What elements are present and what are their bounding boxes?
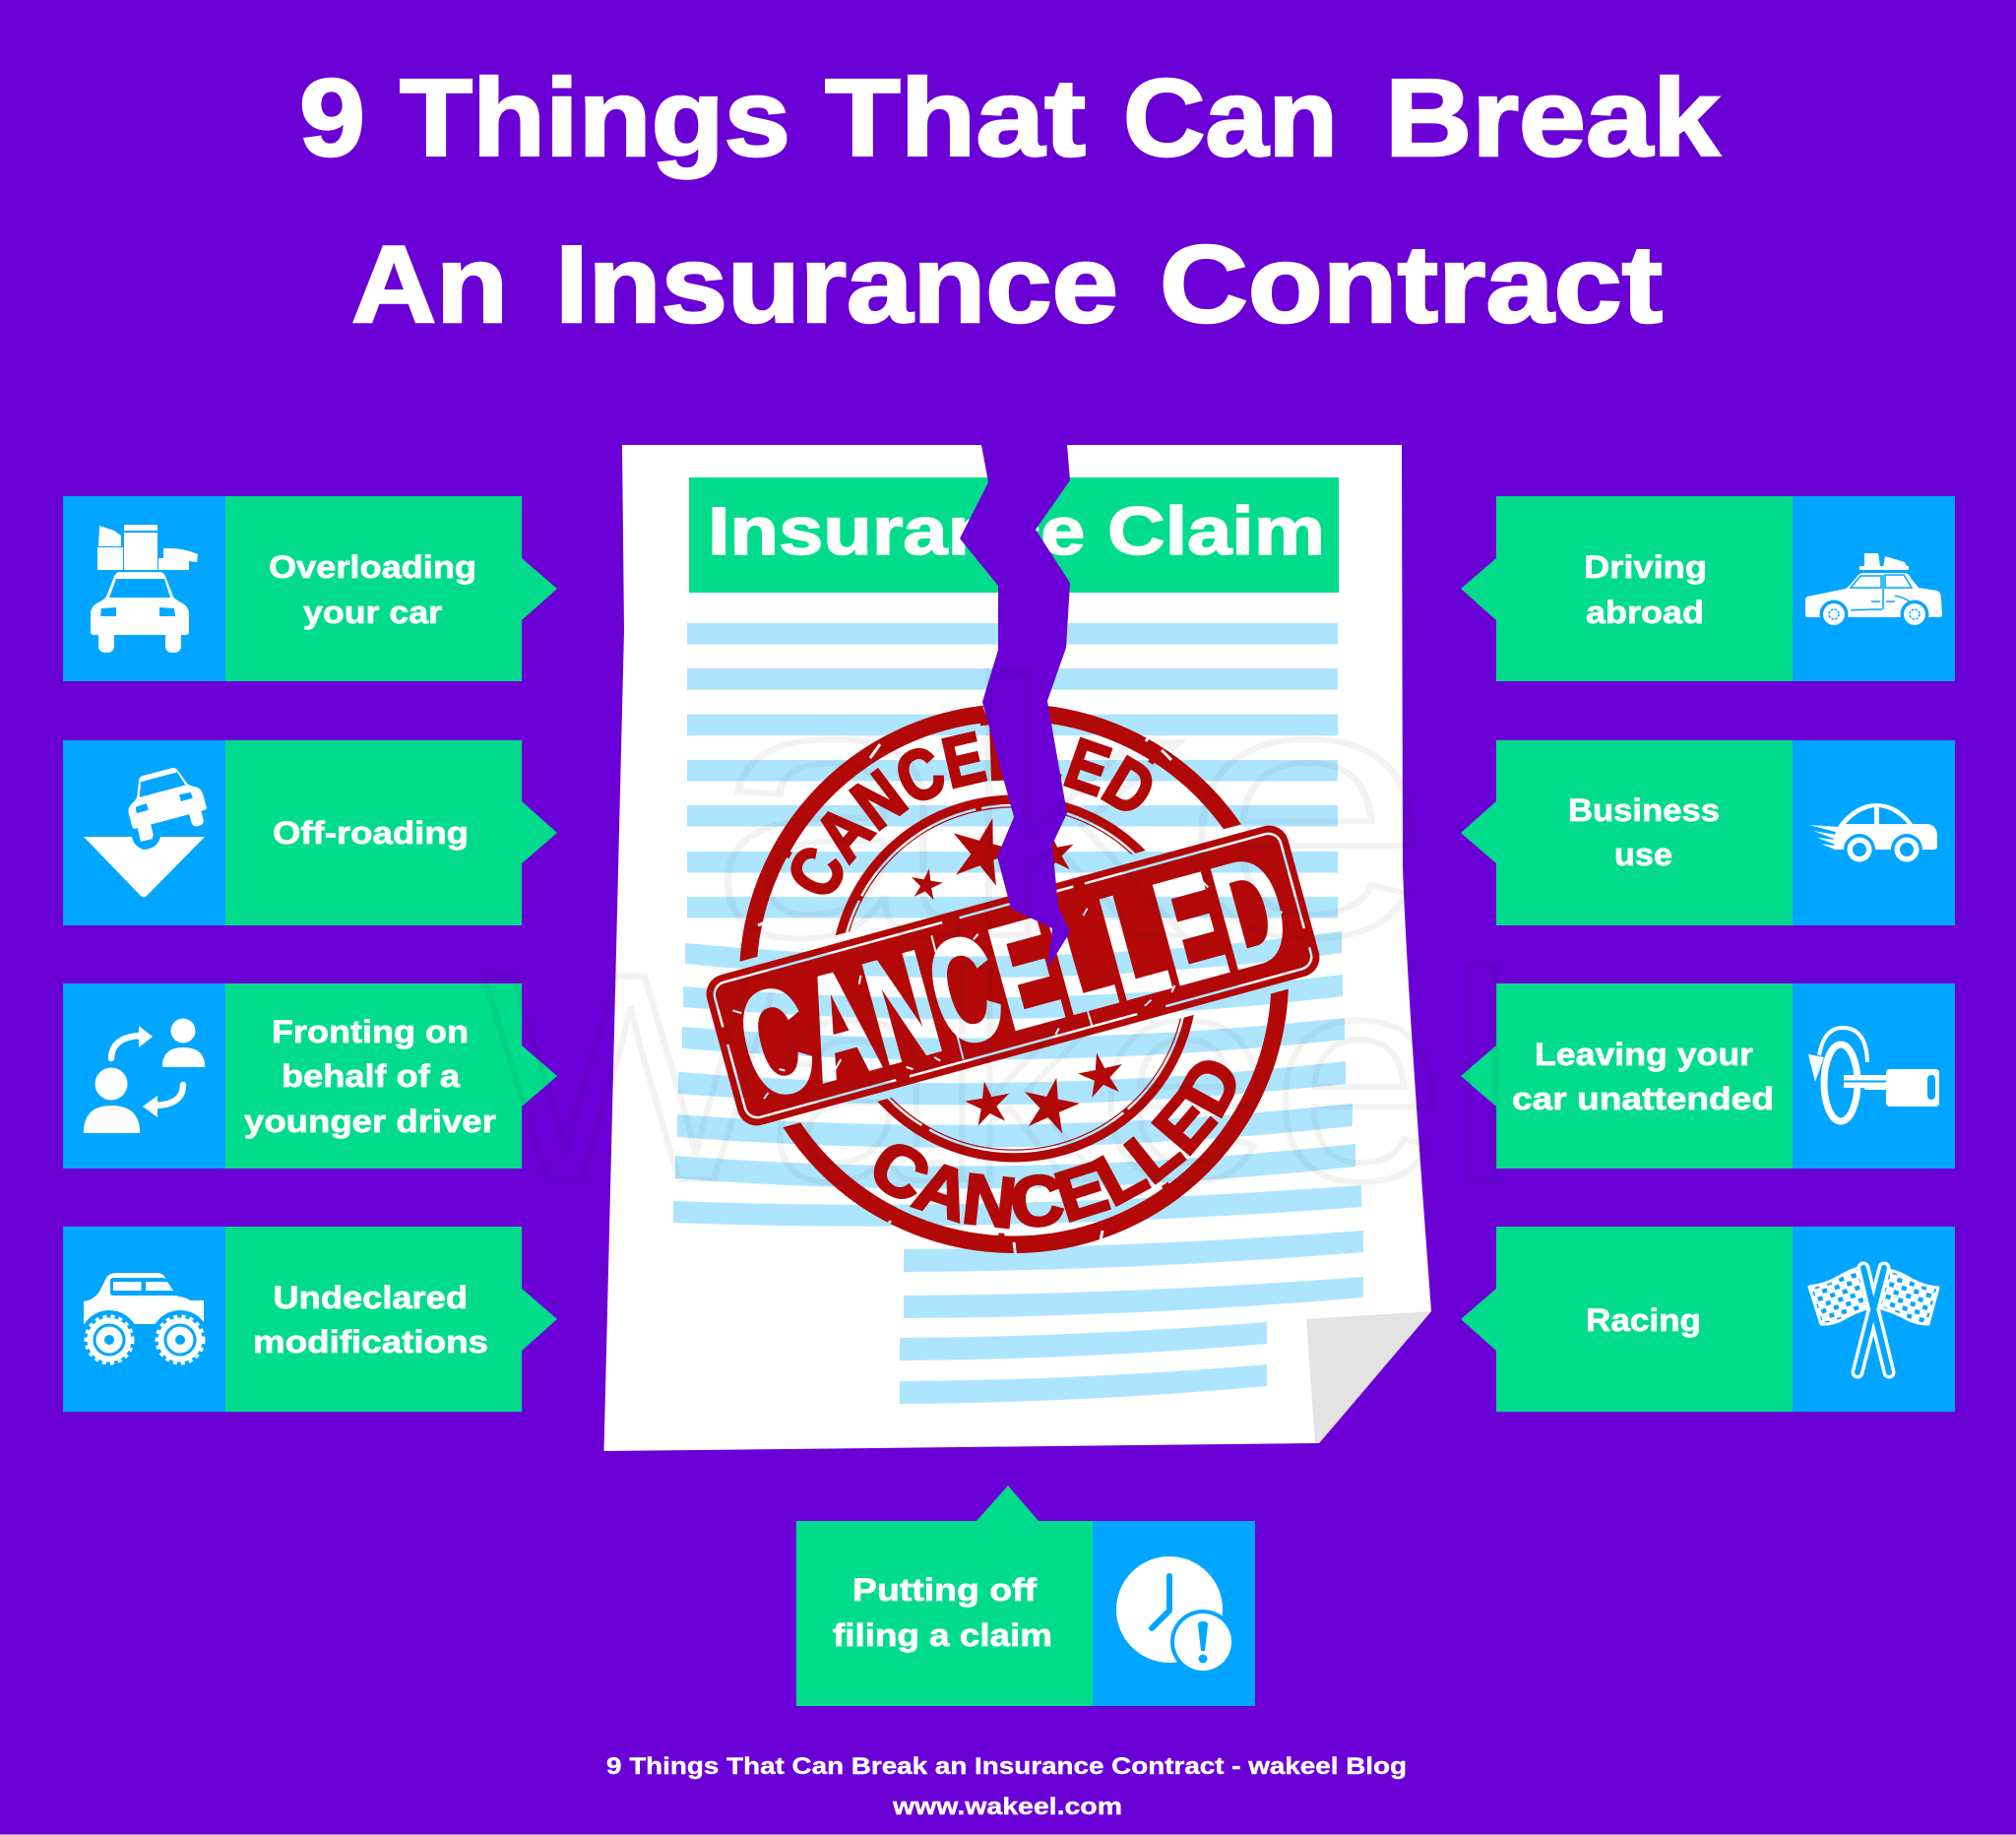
label text: your car xyxy=(303,595,442,630)
stamp rings and curved text: CANCELLED xyxy=(790,728,1152,895)
title: An xyxy=(351,223,508,346)
cancelled stamp xyxy=(707,705,1319,1253)
blue icon box xyxy=(1793,740,1955,925)
icon: car falling into a pothole xyxy=(84,762,211,898)
label text: Business xyxy=(1568,792,1720,828)
title: Break xyxy=(1385,57,1720,179)
folded corner xyxy=(1306,1311,1431,1443)
green label xyxy=(796,1486,1093,1706)
label text: abroad xyxy=(1586,595,1704,630)
card: Racing xyxy=(1461,1227,1955,1412)
label text xyxy=(833,1572,1052,1653)
watermark: ake xyxy=(709,606,1432,1013)
icon: speeding car xyxy=(1809,803,1937,865)
footer: 9 Things That Can Break an Insurance Contract - wakeel Blog xyxy=(606,1753,1407,1780)
watermark xyxy=(482,606,1516,1242)
label text: Leaving your xyxy=(1535,1037,1753,1072)
document heading: Insurance Claim xyxy=(689,477,1339,593)
green label xyxy=(1461,740,1793,925)
green label xyxy=(1461,1227,1793,1412)
label text xyxy=(1568,792,1720,872)
icon: two people swapping xyxy=(84,1018,205,1133)
title: Insurance xyxy=(555,223,1118,346)
label text: Off-roading xyxy=(273,815,469,851)
green label xyxy=(1461,496,1793,681)
paper sheet xyxy=(604,445,1431,1451)
label text: Fronting on xyxy=(272,1014,469,1049)
card: Off-roading xyxy=(63,740,557,925)
icon: monster truck xyxy=(80,1273,210,1369)
icon: car with roof luggage xyxy=(1805,553,1942,628)
title xyxy=(299,57,1720,346)
label text: behalf of a xyxy=(282,1058,461,1094)
card: Putting off filing a claim xyxy=(796,1486,1255,1706)
stamp rings and curved text: CANCELLED xyxy=(874,1060,1236,1229)
label text xyxy=(269,549,476,630)
footer xyxy=(606,1753,1407,1820)
title: 9 xyxy=(299,57,365,179)
label text: use xyxy=(1614,837,1672,872)
label text: car unattended xyxy=(1512,1081,1774,1116)
label text: modifications xyxy=(253,1324,488,1360)
card: Overloading your car xyxy=(63,496,557,681)
label text: Driving xyxy=(1584,549,1707,585)
stamp stars xyxy=(909,809,1127,1136)
footer: www.wakeel.com xyxy=(892,1794,1122,1820)
card: Leaving your car unattended xyxy=(1461,983,1955,1169)
title: Can xyxy=(1123,57,1338,179)
card: Undeclared modifications xyxy=(63,1227,557,1412)
green label xyxy=(1461,983,1793,1169)
label text: Undeclared xyxy=(274,1280,468,1315)
title: Things xyxy=(400,57,790,179)
icon: key in ignition xyxy=(1808,1028,1939,1121)
label text: filing a claim xyxy=(833,1617,1052,1653)
blue icon box xyxy=(1793,496,1955,681)
label text: younger driver xyxy=(244,1104,496,1139)
label text xyxy=(253,1280,488,1360)
blue icon box xyxy=(63,496,225,681)
green label xyxy=(225,496,557,681)
blue icon box xyxy=(1793,983,1955,1169)
green label xyxy=(225,740,557,925)
card: Driving abroad xyxy=(1461,496,1955,681)
blue icon box xyxy=(63,983,225,1169)
title: That xyxy=(825,57,1086,179)
stamp band with CANCELLED xyxy=(702,821,1324,1130)
green label xyxy=(225,1227,557,1412)
icon: crossed checkered flags xyxy=(1809,1267,1938,1372)
icon: clock with alert xyxy=(1116,1556,1235,1675)
label text: Overloading xyxy=(269,549,476,585)
blue icon box xyxy=(63,1227,225,1412)
stamp rings and curved text xyxy=(740,705,1289,1253)
label text xyxy=(1512,1037,1774,1116)
tear in document xyxy=(960,445,1070,969)
document heading: Insurance Claim: Insurance Claim xyxy=(708,493,1325,569)
icon: overloaded car xyxy=(91,525,198,653)
watermark: Wakeel xyxy=(482,912,1516,1242)
card: Business use xyxy=(1461,740,1955,925)
label text: Putting off xyxy=(852,1572,1037,1608)
card: Fronting on behalf of a younger driver xyxy=(63,983,557,1169)
blue icon box xyxy=(63,740,225,925)
label text xyxy=(1584,549,1707,630)
green label xyxy=(225,983,557,1169)
title: Contract xyxy=(1160,223,1663,346)
label text xyxy=(244,1014,496,1139)
blue icon box xyxy=(1093,1521,1255,1706)
panel: torn insurance claim document xyxy=(604,445,1431,1451)
label text: Racing xyxy=(1586,1302,1701,1338)
blue icon box xyxy=(1793,1227,1955,1412)
document text lines xyxy=(673,623,1363,1404)
